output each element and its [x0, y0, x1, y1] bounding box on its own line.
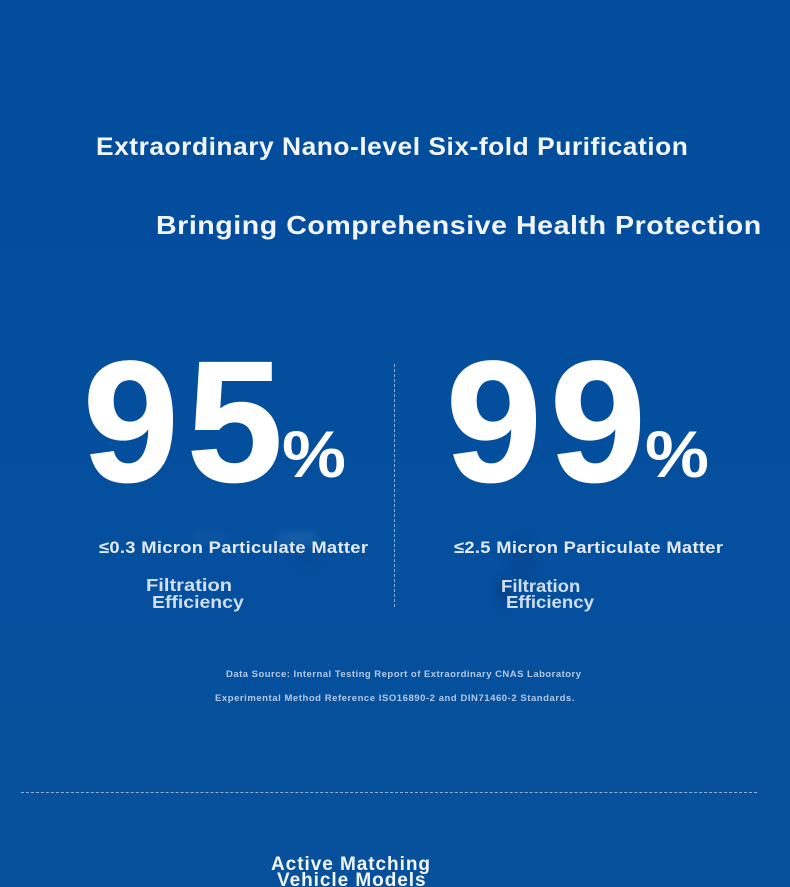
percent sign: %	[282, 417, 346, 491]
label: 0.3 micron filtration efficiency: Filtration	[146, 575, 232, 595]
label: 2.5 micron filtration efficiency: Efficiency	[506, 592, 594, 612]
section heading: active matching vehicle models	[271, 854, 431, 887]
label: 2.5 micron filtration efficiency	[501, 576, 594, 612]
percent sign: %	[645, 417, 709, 491]
stat: 95 percent	[83, 326, 346, 518]
horizontal dashed divider	[21, 792, 757, 793]
title line 1: Extraordinary Nano-level Six-fold Purification	[96, 133, 688, 161]
title line 2: Bringing Comprehensive Health Protection	[156, 210, 762, 240]
section heading: active matching vehicle models: Active Matching	[271, 854, 431, 875]
label: 2.5 micron filtration efficiency: Filtration	[501, 576, 580, 596]
stat: 99 percent	[446, 326, 709, 518]
note: data source: Data Source: Internal Testing Report of Extraordinary CNAS Laboratory	[226, 669, 581, 680]
note: experimental method: Experimental Method Reference ISO16890-2 and DIN71460-2 Standards.	[215, 693, 575, 704]
number 95: 95	[83, 326, 291, 518]
label: 0.3 micron filtration efficiency: Efficiency	[152, 592, 244, 612]
label: 2.5 micron: ≤2.5 Micron Particulate Matter	[454, 538, 723, 557]
vertical dashed divider	[394, 364, 395, 607]
number 99: 99	[446, 326, 654, 518]
label: 0.3 micron: ≤0.3 Micron Particulate Matter	[99, 538, 368, 557]
label: 0.3 micron filtration efficiency	[146, 575, 244, 612]
